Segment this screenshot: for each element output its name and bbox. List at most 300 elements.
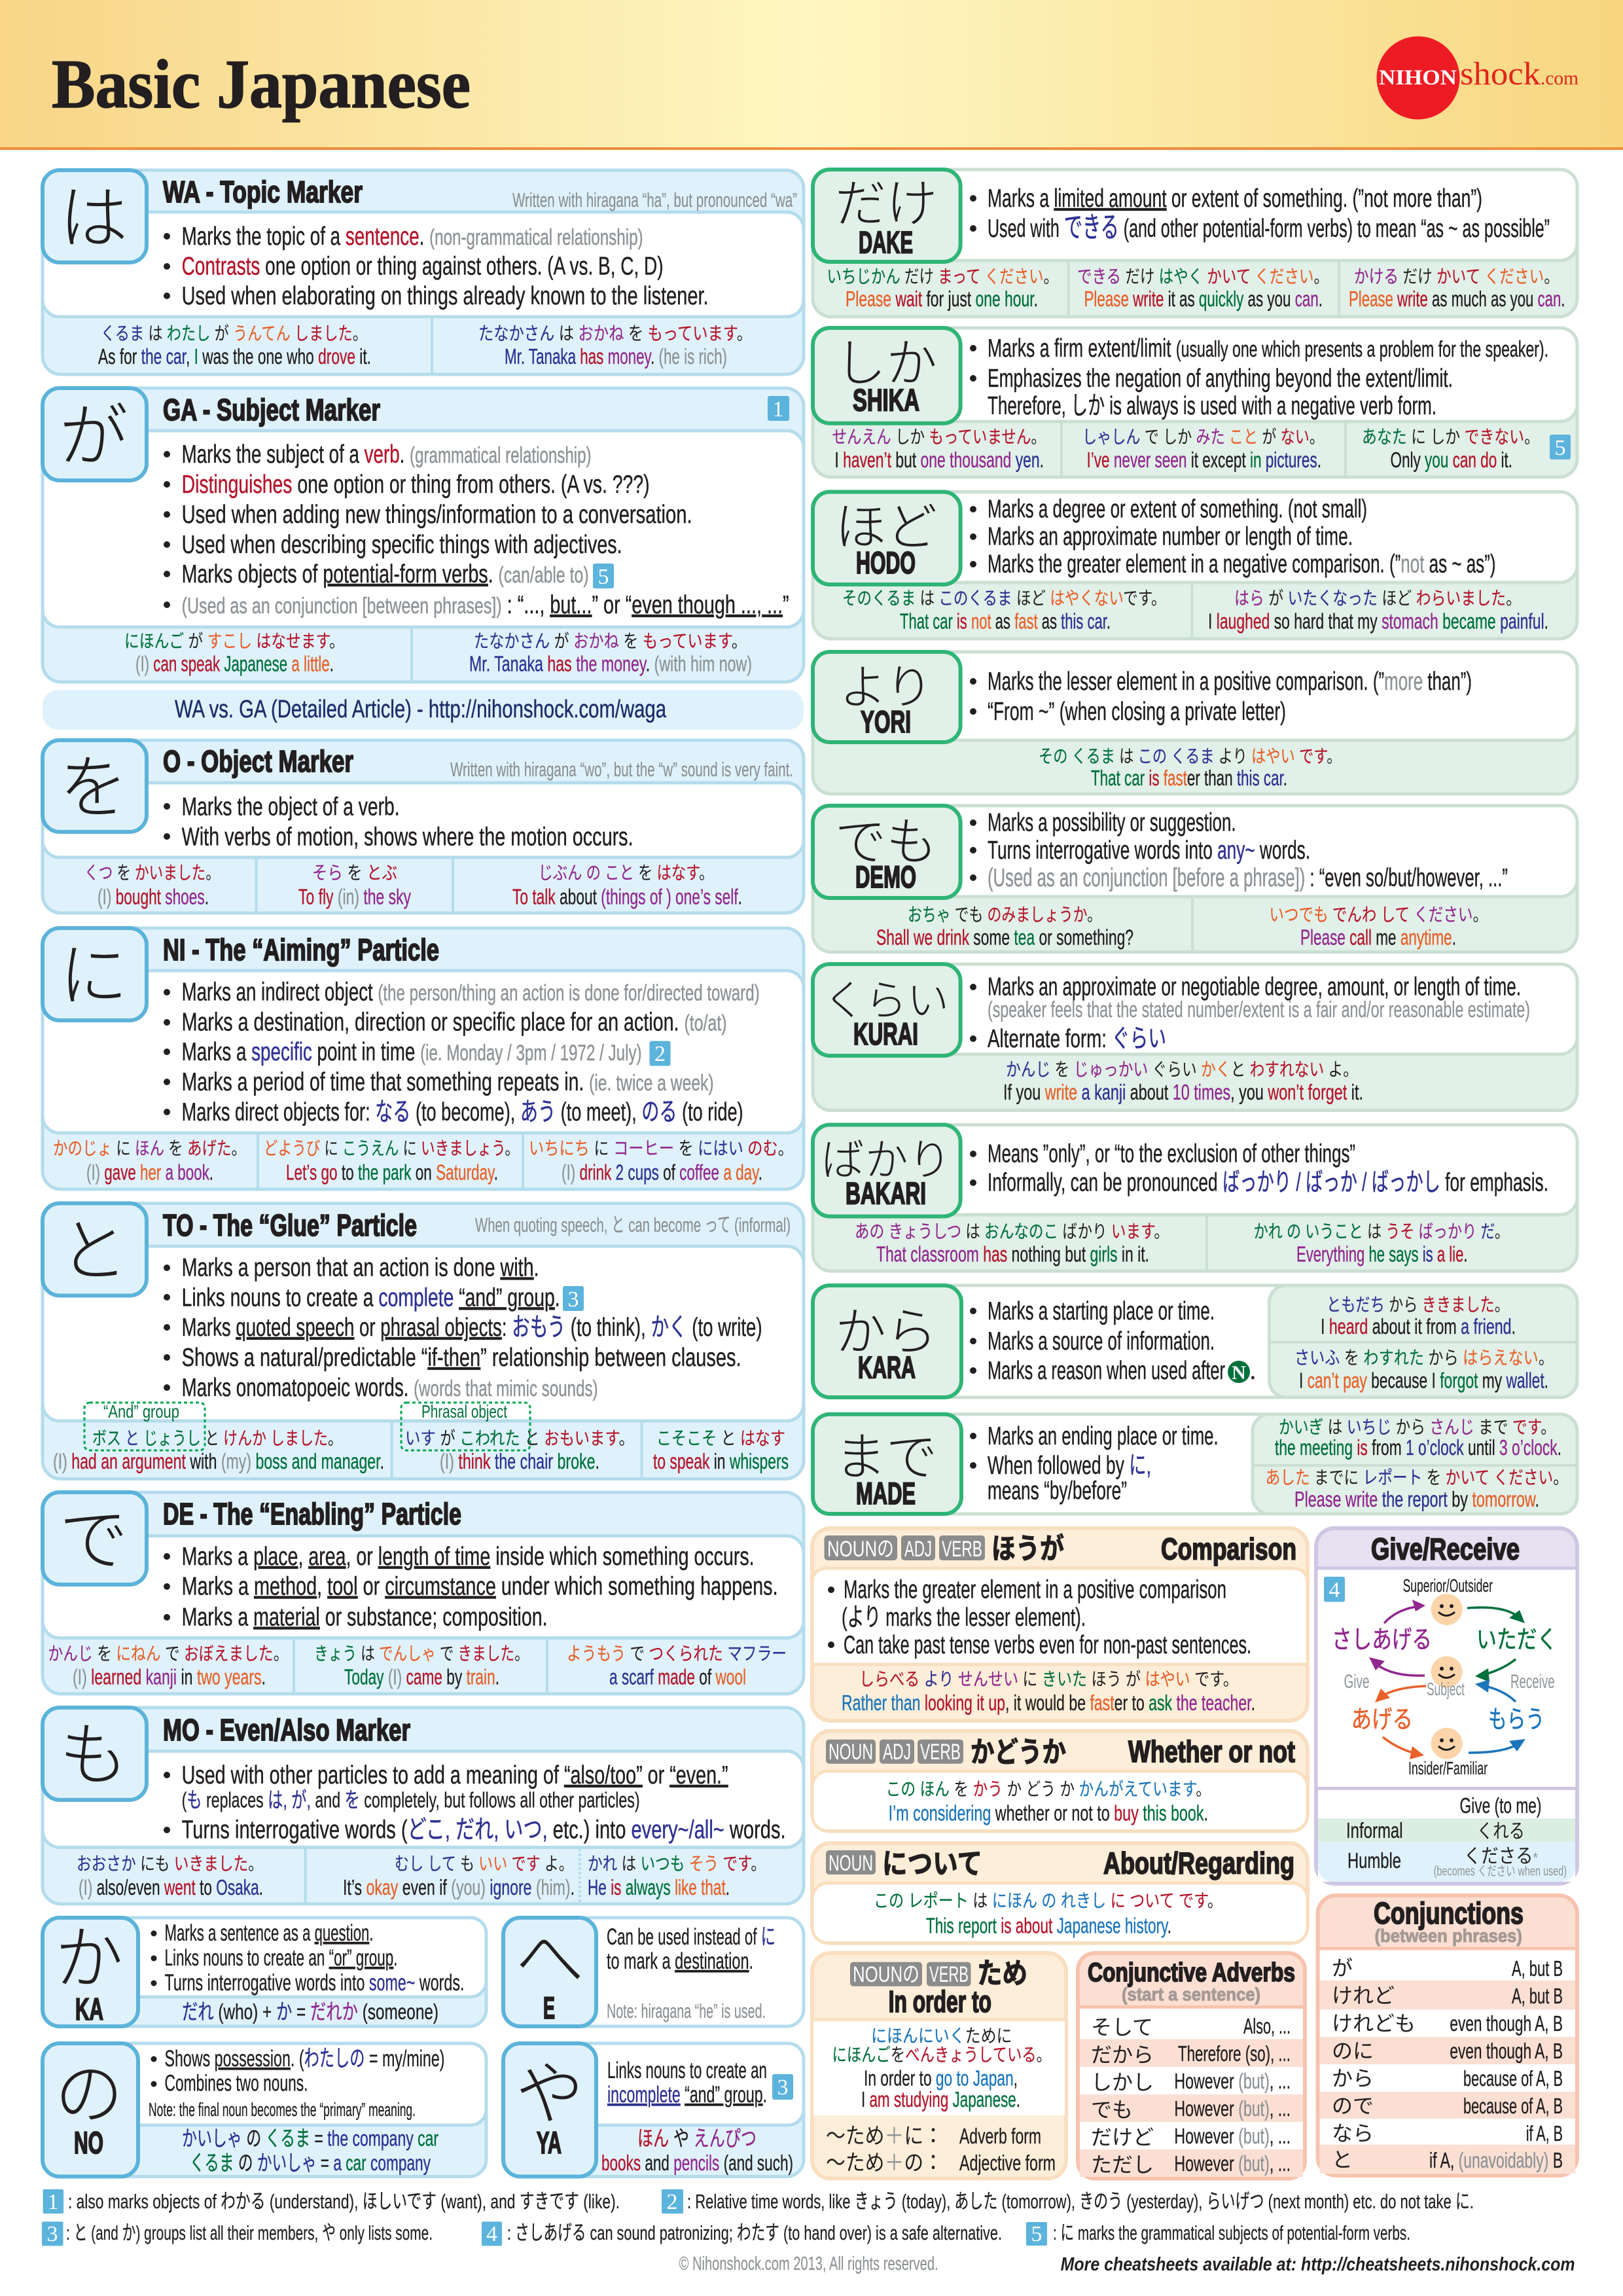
note: When quoting speech, と can become って (informal) [475,1213,791,1236]
table text: そして [1091,2016,1153,2039]
bullets: With verbs of motion, shows where the motion occurs. [182,823,633,851]
bullets [164,978,760,1126]
kana icon: yori [813,652,961,742]
table text: if A, (unavoidably) B [1429,2148,1563,2172]
footnote 3: 3 [47,2222,58,2246]
kana icon: yori: YORI [861,704,911,739]
callout: phrasal object [401,1401,530,1450]
panel: conjunctions [1318,1895,1577,2176]
examples [182,2126,438,2175]
kana icon: yori: より [840,662,933,714]
bullets: Means ”only”, or “to the exclusion of other things” [988,1140,1355,1168]
bullets: Marks a sentence as a question. [165,1920,374,1946]
kana icon: kara: KARA [858,1350,916,1385]
examples: じぶん の こと を はなす。 [538,863,713,883]
panel: MADE [813,1414,1577,1514]
bullets: Marks the greater element in a negative comparison. (”not as ~ as”) [988,550,1496,579]
kana icon: shika: しか [835,334,937,392]
bullets [970,1140,1548,1197]
callout: and group [84,1401,205,1450]
panel: DE enabling particle [43,1492,804,1694]
bullets: Used when describing specific things with adjectives. [182,531,622,559]
badge 5: 5 [598,565,609,589]
kana icon: wo: を [59,750,128,827]
examples: I haven’t but one thousand yen. [834,448,1044,472]
bullets: Distinguishes one option or thing from others. (A vs. ???) [182,471,650,499]
heading: Conjunctions [1374,1896,1524,1930]
examples: そのくるま は このくるま ほど はやくないです。 [842,588,1166,609]
badge 2 [649,1041,670,1066]
examples: あなた に しか できない。 [1362,427,1539,447]
bullets: (Used as an conjunction [between phrases]) : “..., but...” or “even though ..., ...” [182,591,789,619]
footnote 5: : に marks the grammatical subjects of potential-form verbs. [1053,2221,1410,2244]
kana icon: e [503,1918,596,2026]
forms: 〜ため＋に： [826,2124,943,2149]
kana icon: kara: から [835,1303,937,1361]
kana icon: bakari: BAKARI [846,1176,926,1211]
example: この レポート は にほん の れきし に ついて です。 [874,1891,1222,1911]
diagram: give receive cycle [1332,1575,1558,1778]
example box: I heard about it from a friend. [1321,1314,1516,1338]
text: Links nouns to create an [607,2058,767,2083]
footnote 1 [43,2189,620,2214]
tags: NOUN [829,1740,873,1765]
table text: でも [1091,2098,1133,2122]
bullets: Shows possession. (わたしの = my/mine) [165,2046,445,2072]
tags: ADJ [883,1740,911,1765]
example: かんじ を じゅっかい ぐらい かくと わすれない よ。 [1006,1060,1358,1080]
examples: That car is not as fast as this car. [900,609,1111,633]
tags [825,1535,985,1562]
examples: むし して も いい です よ。 [395,1854,573,1874]
examples: かける だけ かいて ください。 [1354,266,1559,287]
text [607,1924,776,2022]
examples: かいしゃ の くるま = the company car [182,2126,438,2151]
example box: Please write the report by tomorrow. [1294,1487,1539,1511]
heading: DE - The “Enabling” Particle [163,1497,461,1531]
bullets [151,1920,465,1996]
bullets: Marks quoted speech or phrasal objects: おもう (to think), かく (to write) [182,1314,762,1342]
heading: comparison: Comparison [1161,1532,1296,1566]
panel: KARA [813,1285,1577,1397]
examples: Mr. Tanaka has the money. (with him now) [469,652,752,676]
table text: けれども [1332,2011,1416,2035]
table text: だから [1091,2043,1154,2067]
examples: That classroom has nothing but girls in it. [876,1242,1149,1266]
example box: かいぎ は いちじ から さんじ まで です。 [1279,1417,1556,1437]
examples: a scarf made of wool [609,1665,746,1689]
example: にほんごをべんきょうしている。 [832,2045,1051,2065]
panel: GA subject marker [43,388,804,682]
badge 3: 3 [777,2075,788,2100]
example [1039,746,1342,790]
table: give to me: Informal [1346,1818,1403,1842]
badge 4 [1324,1577,1345,1602]
bullets: Shows a natural/predictable “if-then” relationship between clauses. [182,1344,741,1372]
banner: WA vs GA link: WA vs. GA (Detailed Article) - http://nihonshock.com/waga [175,696,667,723]
kana icon: made: まで [835,1428,937,1486]
bullets: Marks the greater element in a positive comparison [844,1575,1226,1604]
text: to mark a destination. [607,1948,753,1974]
logo: NIHONshock.com: .com [1541,67,1578,89]
heading: Conjunctive Adverbs [1088,1958,1295,1987]
kana icon: no: の [54,2056,124,2133]
table text: However (but), ... [1174,2096,1291,2121]
heading: MO - Even/Also Marker [163,1713,410,1747]
panel: NO [43,2043,486,2177]
bullets: Marks the subject of a verb. (grammatical relationship) [182,440,592,469]
kana icon: bakari [813,1124,961,1216]
badge 4: 4 [1329,1578,1340,1602]
examples: きょう は でんしゃ で きました。 [314,1643,529,1664]
bullets: Marks a reason when used after [988,1357,1225,1385]
example [886,1779,1211,1825]
table text: けれど [1332,1984,1395,2007]
examples: ようもう で つくられた マフラー [567,1643,787,1664]
examples [827,266,1565,311]
kana icon: shika: SHIKA [853,382,919,418]
table text: から [1332,2067,1374,2090]
tags: NOUNの [853,1962,919,1987]
panel: conjunctive adverbs [1078,1953,1305,2178]
heading: WA - Topic Marker [163,175,363,209]
title: Basic Japanese [52,46,471,122]
example box: さいふ を わすれた から はらえない。 [1294,1348,1554,1368]
diagram: give receive cycle: Receive [1510,1671,1555,1693]
row stripes [1080,2039,1303,2177]
kana icon: dake: だけ [835,175,937,232]
examples: たなかさん が おかね を もっています。 [474,631,747,651]
examples [855,1221,1509,1266]
kana icon: mo [43,1708,147,1800]
bullets: Marks a source of information. [988,1327,1215,1355]
bullets: Turns interrogative words into any~ words. [988,836,1310,865]
examples: Shall we drink some tea or something? [876,925,1133,949]
bullets: Can take past tense verbs even for non-past sentences. [844,1631,1251,1659]
table text: because of A, B [1463,2094,1563,2118]
kana icon: dake: DAKE [859,225,913,259]
subheading: (between phrases) [1374,1926,1522,1946]
bullets: Links nouns to create a complete “and” group. [182,1283,560,1312]
kana icon: ga: が [59,399,128,475]
panel: WA topic marker [43,170,804,374]
diagram: give receive cycle: さしあげる [1332,1626,1432,1654]
examples: It’s okay even if (you) ignore (him). [343,1875,575,1899]
bullets: . [1249,1357,1257,1385]
examples: くるま の かいしゃ = a car company [190,2151,431,2175]
example [874,1891,1222,1937]
example: Rather than looking it up, it would be faster to ask the teacher. [842,1691,1255,1715]
diagram: give receive cycle: あげる [1351,1706,1413,1734]
examples: (I) bought shoes. [98,885,209,909]
heading: Give/Receive [1371,1532,1520,1566]
examples: Please call me anytime. [1300,925,1456,949]
table text: ただし [1091,2153,1154,2177]
examples [124,631,752,676]
row stripes [1320,1981,1575,2174]
icon: N noun marker: N [1232,1362,1246,1384]
diagram: give receive cycle: もらう [1488,1706,1544,1734]
examples: (I) gave her a book. [86,1160,213,1185]
examples [832,427,1539,472]
example box [1270,1285,1577,1397]
bullets: Marks direct objects for: なる (to become), あう (to meet), のる (to ride) [182,1098,743,1126]
panel: give/receive [1316,1528,1577,1884]
heading: について [882,1848,982,1880]
badge 3 [772,2074,793,2100]
example: That car is faster than this car. [1091,766,1287,790]
heading: O - Object Marker [163,744,353,778]
examples: (I) drink 2 cups of coffee a day. [562,1160,762,1185]
examples: いちにち に コーヒー を にはい のむ。 [529,1138,793,1158]
footnote 3 [42,2221,433,2246]
note: Written with hiragana “ha”, but pronounced “wa” [512,188,797,211]
footnote 4: : さしあげる can sound patronizing; わたす (to hand over) is a safe alternative. [507,2221,1002,2244]
examples: (I) also/even went to Osaka. [79,1875,263,1899]
panel: comparison [812,1528,1308,1721]
bullets: Marks the lesser element in a positive comparison. (”more than”) [988,668,1472,696]
kana icon: bakari: ばかり [821,1136,952,1184]
forms: 〜ため＋の： [826,2151,943,2176]
example box: I can’t pay because I forgot my wallet. [1299,1368,1548,1392]
examples: Please write as much as you can. [1349,287,1565,311]
heading: ほうが [991,1533,1064,1565]
bullets [970,1422,1219,1505]
kana icon: dake [813,170,961,262]
examples: いす が こわれた と おもいます。 [405,1428,634,1448]
examples: こそこそ と はなす [656,1428,785,1448]
bullets [164,1761,786,1844]
bullets: (Used as an conjunction [before a phrase]) : “even so/but/however, ...” [988,864,1508,892]
examples: あの きょうしつ は おんなのこ ばかり います。 [855,1221,1169,1242]
bullets [164,440,789,619]
text: Can be used instead of に [607,1924,776,1950]
panel: whether or not [812,1731,1308,1831]
panel: KURAI [813,964,1577,1110]
bullets: Used with other particles to add a meaning of “also/too” or “even.” [182,1761,728,1789]
kana icon: hodo: HODO [856,545,916,580]
examples: ほん や えんぴつ [637,2126,757,2151]
kana icon: no: NO [74,2125,103,2160]
bullets: Contrasts one option or thing against others. (A vs. B, C, D) [182,253,664,280]
diagram: give receive cycle: Superior/Outsider [1403,1575,1493,1596]
note: Written with hiragana “wo”, but the “w” sound is very faint. [450,758,793,781]
panel: DAKE [813,170,1577,317]
table text: if A, B [1526,2121,1563,2145]
example: しらべる より せんせい に きいた ほう が はやい です。 [859,1669,1238,1689]
bullets: Marks a material or substance; composition. [182,1604,548,1632]
example: In order to go to Japan, [864,2066,1018,2090]
kana icon: kurai: くらい [823,977,949,1024]
bullets: (も replaces は, が, and を completely, but follows all other particles) [182,1788,640,1812]
example box: the meeting is from 1 o’clock until 3 o’clock. [1275,1435,1561,1460]
badge 3 [563,1286,584,1312]
forms [826,2124,1056,2176]
examples: (I) learned kanji in two years. [73,1665,266,1689]
tags: VERB [929,1962,969,1987]
table: give to me: Give (to me) [1459,1793,1542,1818]
kana icon: ka [43,1918,138,2026]
table text: しかし [1091,2071,1154,2094]
example: I’m considering whether or not to buy this book. [889,1801,1208,1825]
table text: のに [1332,2039,1374,2062]
bullets: Note: the final noun becomes the “primary” meaning. [149,2100,416,2121]
table text: because of A, B [1463,2066,1563,2090]
examples: He is always like that. [588,1875,730,1899]
kana icon: to [43,1203,147,1296]
kana icon: ka: か [54,1921,124,1998]
bullets [828,1575,1251,1659]
bullets: Combines two nouns. [165,2071,308,2096]
bullets: Marks a place, area, or length of time inside which something occurs. [182,1543,755,1571]
examples: ボス と じょうし と けんか しました。 [92,1428,342,1448]
table: give to me: Humble [1347,1848,1401,1873]
example: にほんにいくために [871,2026,1012,2046]
examples: I laughed so hard that my stomach became painful. [1208,609,1548,633]
examples: Mr. Tanaka has money. (he is rich) [505,344,727,368]
examples: いちじかん だけ まって ください。 [827,266,1058,287]
kana icon: hodo: ほど [835,498,937,556]
kana icon: made [813,1414,961,1514]
heading: ため [977,1958,1027,1990]
examples: Please wait for just one hour. [846,287,1038,311]
kana icon: kurai [813,964,961,1056]
example [842,1669,1255,1715]
kana icon: e: E [543,1990,555,2025]
bullets [164,1543,778,1632]
bullets: Turns interrogative words (どこ, だれ, いつ, etc.) into every~/all~ words. [182,1816,786,1844]
examples: (I) can speak Japanese a little. [135,652,334,676]
examples [53,1138,793,1185]
bullets [970,334,1548,420]
heading: whether or not: Whether or not [1128,1734,1295,1768]
forms: Adjective form [959,2151,1056,2175]
heading: GA - Subject Marker [163,393,380,427]
table text: A, but B [1512,1956,1563,1981]
examples [876,905,1488,949]
examples: しゃしん で しか みた こと が ない。 [1082,427,1324,447]
example: その くるま は この くるま より はやい です。 [1039,746,1342,766]
bullets: Marks a degree or extent of something. (not small) [988,495,1367,524]
panel: DEMO [813,806,1577,952]
examples: to speak in whispers [653,1449,789,1473]
bullets [970,495,1496,579]
bullets [149,2046,445,2121]
table text: Also, ... [1243,2014,1291,2038]
kana icon: ha [43,170,147,262]
table: give to me [1318,1793,1575,1882]
bullets: Marks an ending place or time. [988,1422,1219,1450]
kana icon: kurai: KURAI [853,1016,918,1051]
examples: (I) think the chair broke. [440,1449,599,1473]
examples [98,323,752,368]
kana icon: mo: も [59,1717,128,1794]
diagram: give receive cycle: いただく [1476,1626,1558,1654]
examples: せんえん しか もっていません。 [832,427,1046,447]
panel: MO even/also marker [43,1708,804,1904]
bullets [164,1254,762,1402]
footnote 2: 2 [666,2190,678,2214]
examples: Today (I) came by train. [344,1665,499,1689]
kana icon: ya: YA [537,2125,562,2160]
kana icon: hodo [813,492,961,584]
examples: かのじょ に ほん を あげた。 [53,1138,246,1158]
bullets: Marks a starting place or time. [988,1297,1215,1325]
table text [1091,2014,1291,2177]
panel: E [503,1918,804,2026]
examples: にほんご が すこし はなせます。 [124,631,344,651]
examples: Please write it as quickly as you can. [1084,287,1323,311]
examples [842,588,1548,633]
table text: However (but), ... [1174,2151,1291,2176]
kana icon: demo [813,806,961,898]
kana icon: shika [813,328,961,423]
panel: about/regarding [812,1843,1308,1943]
example: This report is about Japanese history. [926,1913,1171,1937]
bullets: Marks onomatopoeic words. (words that mimic sounds) [182,1374,598,1402]
kana icon: demo: DEMO [855,859,916,894]
examples: To talk about (things of ) one’s self. [512,885,742,909]
heading: in order to: In order to [889,1984,991,2018]
copyright: © Nihonshock.com 2013, All rights reserved. [679,2253,938,2274]
tag [826,1850,876,1876]
panel: YORI [813,652,1577,794]
heading: NI - The “Aiming” Particle [163,933,439,967]
example: I am studying Japanese. [861,2087,1020,2111]
bullets: Alternate form: ぐらい [988,1025,1166,1053]
table text: Therefore (so), ... [1178,2041,1291,2066]
kana icon: no [43,2043,138,2177]
bullets: Marks a limited amount or extent of something. (”not more than”) [988,185,1482,213]
bullets: Marks a possibility or suggestion. [988,809,1236,837]
kana icon: ya [503,2043,596,2177]
bullets: Marks a destination, direction or specific place for an action. (to/at) [182,1008,727,1037]
forms: Adverb form [959,2124,1041,2148]
bullets: Marks objects of potential-form verbs. (can/able to) [182,560,589,588]
text: Note: hiragana “he” is used. [607,2000,766,2022]
kana icon: de [43,1492,147,1585]
table text: However (but), ... [1174,2124,1291,2148]
examples: くるま は わたし が うんてん しました。 [101,323,367,344]
table text: だけど [1091,2126,1154,2149]
badge 3: 3 [568,1287,579,1312]
panel: TO glue particle [43,1203,804,1479]
example: この ほん を かう か どう か かんがえています。 [886,1779,1211,1799]
panel: NI aiming particle [43,928,804,1189]
kana icon: ya: や [515,2056,584,2133]
examples: おおさか にも いきました。 [77,1854,263,1874]
bullets: Informally, can be pronounced ばっかり / ばっか / ばっかし for emphasis. [988,1169,1548,1197]
badge 5 [1550,435,1571,460]
kana icon: ka: KA [75,1992,103,2026]
examples: くつ を かいました。 [84,863,220,883]
bullets [970,973,1530,1053]
examples: Everything he says is a lie. [1296,1242,1467,1266]
kana icon: to: と [59,1213,128,1290]
panel: tame in order to [812,1953,1066,2178]
examples: To fly (in) the sky [298,885,411,909]
bullets: Marks an approximate number or length of time. [988,523,1353,551]
panel: KA [43,1918,486,2026]
diagram: give receive cycle: Subject [1427,1679,1465,1699]
bullets: Marks a period of time that something repeats in. (ie. twice a week) [182,1068,714,1096]
diagram: give receive cycle: Give [1344,1671,1369,1693]
banner: WA vs GA link [43,690,804,730]
panel: O object marker [43,740,804,913]
kana icon: ha: は [59,181,128,257]
heading: かどうか [971,1736,1066,1768]
examples [601,2126,793,2175]
